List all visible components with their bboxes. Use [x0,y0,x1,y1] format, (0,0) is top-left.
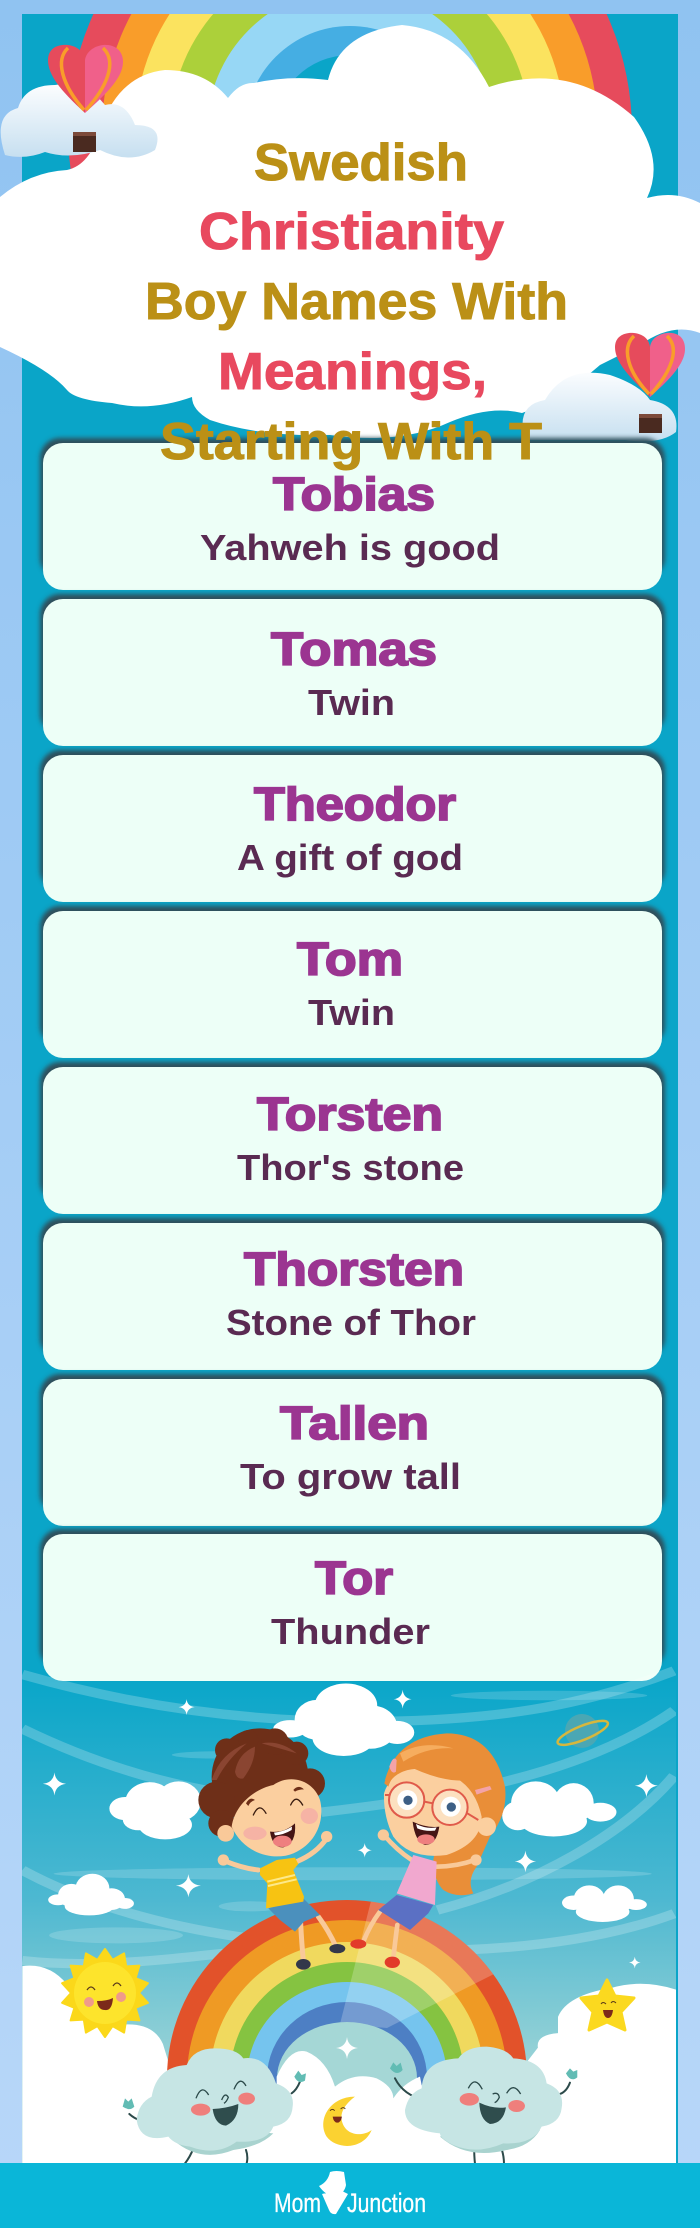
cloud top [273,1684,414,1756]
sparkle under rainbow [336,2037,358,2059]
sky [22,1682,676,2163]
card: Tobias [40,438,665,590]
meaning: Stone of Thor: Stone of Thor [226,1302,476,1343]
smiling cloud right [390,2047,577,2163]
name: Torsten: Torsten [257,1088,443,1140]
card: Tomas [40,594,665,746]
panel: name cards [40,438,665,1681]
header illustration: rainbow and clouds [0,0,700,441]
cloud left [109,1781,201,1839]
meaning: Twin: Twin [308,992,395,1033]
name: Tobias: Tobias [273,468,435,520]
card: Torsten [40,1062,665,1214]
cloud right [502,1781,616,1836]
white bottom clouds [22,1966,676,2164]
meaning: Thunder: Thunder [271,1611,430,1652]
name: Theodor: Theodor [254,778,456,830]
card: Theodor [40,750,665,902]
name: Tallen: Tallen [280,1397,429,1449]
main title cloud [0,25,700,438]
card: Thorsten [40,1218,665,1370]
meaning: A gift of god: A gift of god [237,837,463,878]
icon: star [581,1980,634,2030]
boy [198,1728,345,1970]
title: Meanings, [218,343,487,401]
logo: MomJunction [274,2171,426,2218]
rainbow [167,1885,527,2090]
sparkles [43,1690,658,1968]
girl [350,1733,505,1968]
title [145,134,568,471]
small cloud left [1,84,157,158]
name: Tom: Tom [297,933,403,985]
card: Tor [40,1529,665,1681]
icon: sun [62,1949,148,2037]
meaning: To grow tall: To grow tall [240,1456,461,1497]
boy hair [198,1728,325,1837]
title: Starting With T [160,413,542,471]
icon: heart balloon left [48,45,123,152]
footer band [0,2163,700,2228]
header rainbow [69,14,632,169]
name: Tor: Tor [315,1552,393,1604]
title: Boy Names With [145,273,568,331]
small cloud right [522,373,676,441]
card: Tallen [40,1374,665,1526]
bottom illustration [22,1671,676,2164]
name: Tomas: Tomas [271,623,437,675]
meaning: Twin: Twin [308,682,395,723]
card: Tom [40,906,665,1058]
cloud small right [562,1885,647,1922]
icon: moon [323,2097,372,2146]
title: Swedish [254,134,468,192]
icon: planet [556,1714,610,1748]
meaning: Yahweh is good: Yahweh is good [200,527,500,568]
smiling cloud left [123,2048,306,2163]
cloud small left [48,1874,134,1915]
sky details in stretched coordinates [22,1671,676,2164]
white clouds in front of rainbow [184,2051,495,2163]
logo mark [319,2171,348,2214]
icon: heart balloon right [615,333,685,433]
meaning: Thor's stone: Thor's stone [237,1147,464,1188]
title: Christianity [199,203,504,261]
logo: MomJunction: Mom [274,2188,321,2218]
logo: MomJunction: Junction [347,2188,426,2218]
name: Thorsten: Thorsten [244,1243,464,1295]
